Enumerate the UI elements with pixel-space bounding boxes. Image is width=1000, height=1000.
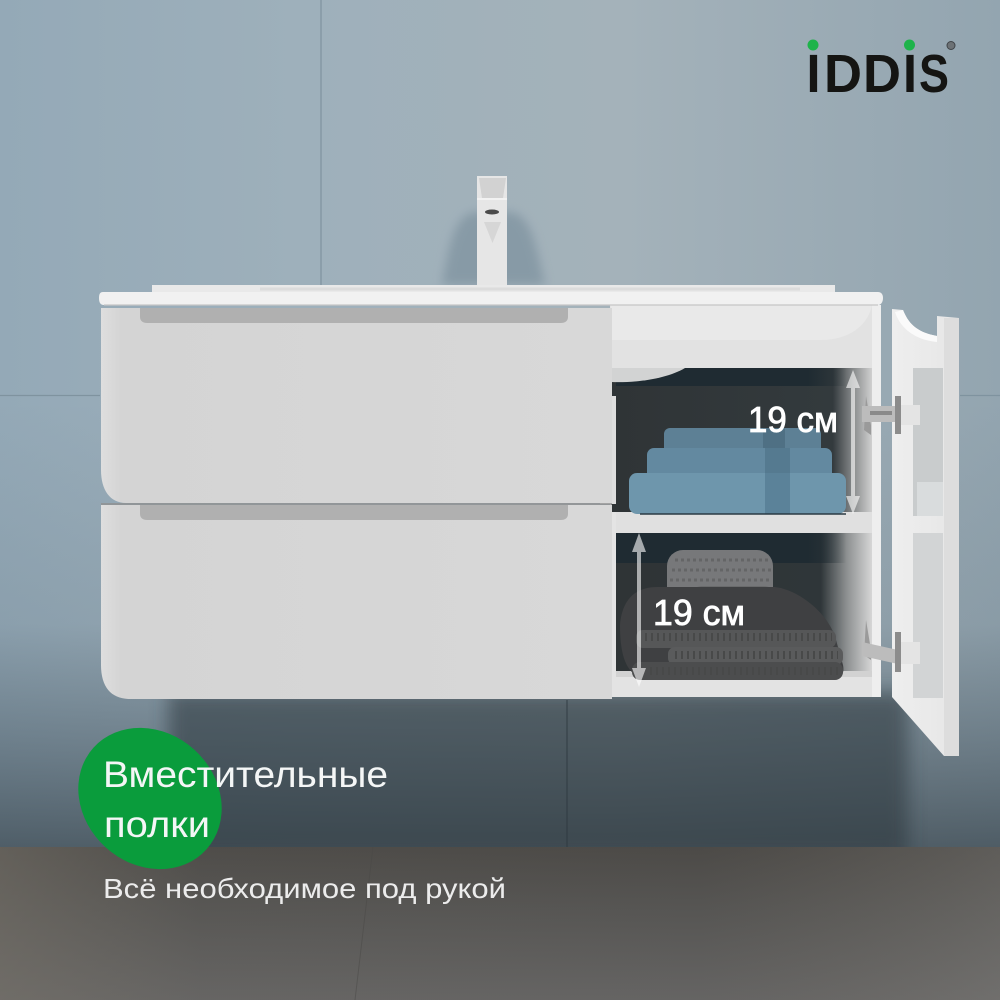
- label: lower shelf height: 19 см: [653, 592, 745, 633]
- faucet: [442, 176, 545, 286]
- registered mark: [947, 42, 955, 50]
- brand logo: [806, 40, 955, 104]
- side panel: [872, 305, 881, 697]
- label: upper shelf height: 19 см: [748, 399, 838, 440]
- arrow: upper shelf height: [846, 370, 860, 514]
- title: [103, 754, 388, 845]
- brand logo: D: [863, 44, 901, 104]
- open door: [892, 309, 959, 756]
- countertop with sink: [99, 285, 883, 305]
- brand logo: D: [824, 44, 862, 104]
- door inner panels: [913, 368, 943, 516]
- bottom board: [610, 671, 880, 697]
- title: Вместительные: [103, 754, 388, 795]
- drawer pieces beside shelves: [600, 396, 616, 504]
- brand logo: S: [919, 44, 949, 104]
- floor: [0, 847, 1000, 1000]
- upper shelf interior: [611, 368, 872, 512]
- subtitle: Всё необходимое под рукой: [103, 873, 506, 904]
- blue towels: [629, 428, 846, 514]
- large folded towel: [620, 587, 843, 680]
- green accent blob: [49, 699, 251, 898]
- upper hinge: [862, 396, 920, 435]
- arrow: lower shelf height: [632, 533, 646, 687]
- upper apron: [611, 305, 872, 368]
- basin underside: [611, 368, 685, 382]
- small folded towel: [667, 550, 776, 616]
- middle towel: [647, 448, 832, 483]
- brand logo: I: [903, 44, 917, 104]
- top drawer: [101, 308, 612, 503]
- cabinet body with open shelves: [610, 305, 881, 697]
- top towel: [664, 428, 821, 457]
- shelf board: [616, 512, 872, 533]
- lower hinge: [862, 620, 920, 672]
- brand logo: I: [806, 44, 820, 104]
- bottom towel: [629, 473, 846, 514]
- lower shelf interior: [616, 533, 872, 671]
- logo dots: [808, 40, 915, 50]
- bottom drawer: [101, 504, 612, 699]
- grey towels: [620, 550, 843, 680]
- title: полки: [104, 804, 210, 845]
